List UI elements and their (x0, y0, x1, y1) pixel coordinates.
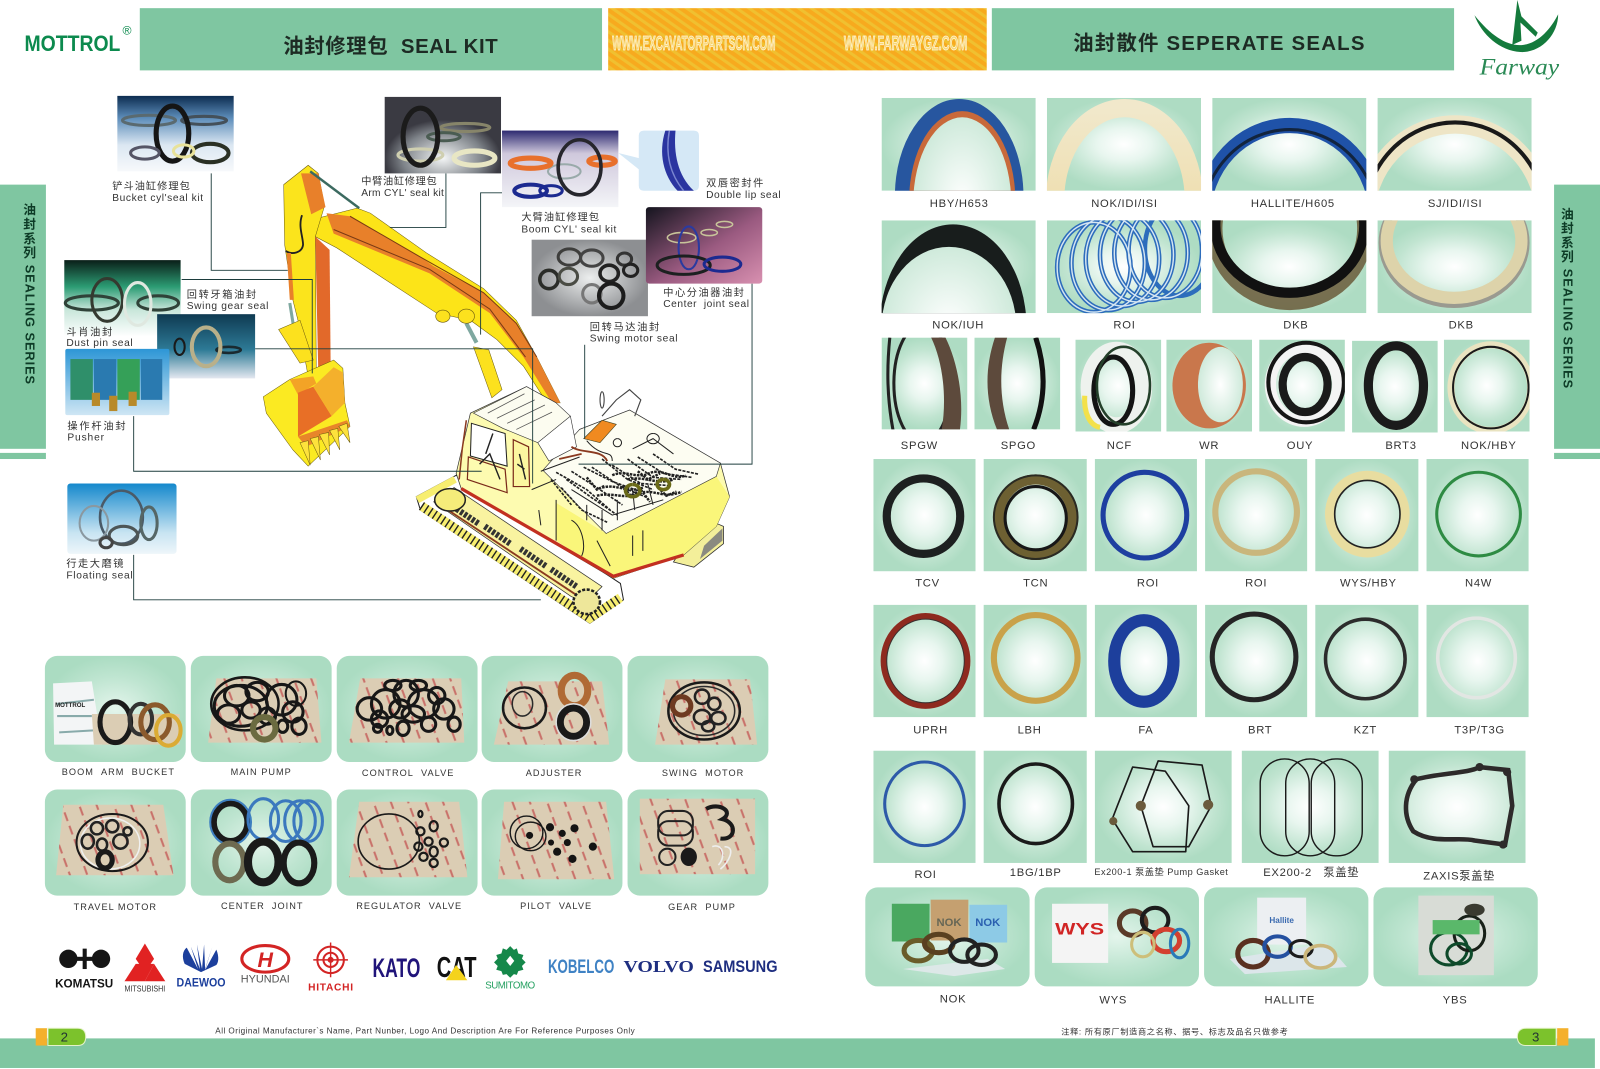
brand logo: MOTTROL: ® (122, 24, 131, 38)
seal: SJ/IDI/ISI (1378, 98, 1532, 191)
labels: seal row 3: NCF (1107, 440, 1132, 452)
sidebar: left sealing series: 系 (23, 231, 36, 246)
lower boom cylinder (473, 347, 502, 398)
logo: Hyundai (241, 946, 290, 985)
seal: 1BG/1BP (984, 751, 1087, 863)
labels: seal row 1 and 2: NOK/IDI/ISI (1091, 198, 1158, 210)
labels: branded kits: YBS (1443, 995, 1467, 1007)
arm (284, 165, 324, 376)
kit: HALLITE (1204, 887, 1368, 986)
seal: DKB black (1212, 220, 1366, 313)
seal: OUY (1259, 340, 1345, 432)
panel: seperate seals row 1 (880, 98, 1546, 430)
labels: seal row 4 (915, 578, 1492, 590)
seal: NCF (1076, 340, 1162, 432)
label: bucket cylinder: Bucket cyl'seal kit (112, 193, 203, 204)
seal: NOK/HBY (1444, 340, 1530, 432)
panel: seperate seals row 5 (873, 605, 1529, 717)
seal: UPRH (873, 605, 976, 717)
logo: Komatsu: KOMATSU (55, 976, 113, 990)
engine deck (543, 410, 720, 533)
sidebar: right sealing series: 封 (1561, 221, 1574, 236)
sidebar: right sealing series: 系 (1561, 235, 1574, 250)
seal: HALLITE/H605 (1212, 98, 1366, 191)
seal: NOK/IDI/ISI (1046, 98, 1201, 191)
seal: N4W (1427, 459, 1529, 571)
labels: seal row 3: WR (1199, 440, 1219, 452)
disclaimer: chinese: 注释: 所有原厂制造商之名称、据号、标志及品名只做参考 (1061, 1026, 1288, 1036)
seal: WR (1166, 340, 1252, 432)
label: swing motor seal: 回转马达油封 (590, 320, 659, 333)
label: swing motor seal: Swing motor seal (590, 334, 678, 345)
photo: floating seal (67, 483, 177, 554)
main track (416, 475, 623, 623)
kit: center joint (191, 790, 332, 896)
labels: seal row 3: SPGO (1001, 440, 1036, 452)
label: dust pin seal: 斗肖油封 (66, 326, 112, 339)
labels: seal row 1 and 2: NOK/IUH (932, 319, 984, 331)
label: pusher: 操作杆油封 (67, 419, 126, 432)
label: swing gear seal: 回转牙箱油封 (187, 288, 256, 301)
labels: branded kits: NOK (940, 994, 966, 1006)
brand logo: MOTTROL: MOTTROL (24, 31, 121, 56)
label: pilot valve: PILOT VALVE (520, 901, 592, 911)
label: main pump: MAIN PUMP (231, 767, 292, 777)
label: boom cylinder: Boom CYL' seal kit (521, 225, 616, 236)
brand logo: Farway: Farway (1479, 54, 1560, 80)
labels: seal row 4: N4W (1465, 578, 1492, 590)
labels: seal row 5: BRT (1248, 724, 1272, 736)
sidebar: left sealing series: SEALING SERIES (23, 265, 38, 384)
label: dust pin seal: Dust pin seal (66, 338, 133, 349)
photo: pusher (65, 349, 169, 415)
kit: WYS (1035, 887, 1199, 986)
label: regulator valve: REGULATOR VALVE (356, 901, 462, 911)
kit: HALLITE: Hallite (1269, 916, 1294, 925)
photo: bucket cylinder seal kit (117, 96, 234, 171)
labels: seal row 6: ROI (914, 869, 937, 881)
kit: NOK (865, 887, 1030, 986)
labels: seal row 4: ROI (1137, 578, 1159, 590)
photo: boom cylinder seal kit (502, 131, 618, 207)
label: boom cylinder (521, 210, 616, 236)
photo: dust pin seal (64, 260, 181, 337)
labels: seal row 6: Ex200-1 泵盖垫 Pump Gasket (1094, 866, 1228, 877)
label: double lip seal: 双唇密封件 (706, 177, 763, 190)
kit: boom arm bucket (45, 656, 186, 762)
label: arm cylinder (361, 175, 444, 199)
labels: seal row 3 (901, 440, 1517, 452)
labels: seal row 4: TCV (915, 578, 940, 590)
labels: seal row 6: ZAXIS泵盖垫 (1423, 868, 1495, 882)
heading: seal kit: 油封修理包 SEAL KIT (283, 35, 498, 58)
logo: Cat: CAT (437, 952, 477, 984)
seal: BRT3 (1352, 340, 1438, 432)
sidebar: right sealing series: 油 (1561, 206, 1574, 221)
excavator illustration (263, 165, 730, 623)
brand logos row (55, 943, 778, 993)
seal: ROI blue (1095, 459, 1197, 571)
label: floating seal (66, 557, 133, 581)
label: travel motor: TRAVEL MOTOR (74, 902, 157, 912)
seal: EX200-2 pump gasket (1242, 751, 1379, 863)
logo: Volvo: VOLVO (623, 957, 694, 976)
label: arm cylinder: 中臂油缸修理包 (361, 175, 437, 188)
cab windows (470, 423, 507, 466)
logo: Hyundai: H (258, 948, 274, 972)
banner: website addresses: WWW.EXCAVATORPARTSCN.COM (612, 33, 776, 55)
logo: Mitsubishi: MITSUBISHI (124, 984, 165, 993)
labels: seal row 6: 1BG/1BP (1010, 867, 1062, 879)
kit: control valve (337, 656, 478, 762)
label: floating seal: Floating seal (66, 570, 133, 581)
engine detail (532, 434, 699, 566)
photo: double lip seal (618, 131, 699, 191)
labels: seal row 3: SPGW (901, 440, 938, 452)
page number: 3 (1517, 1028, 1568, 1046)
sidebar: left sealing series: 油 (23, 202, 36, 217)
arm cylinder and linkage (287, 253, 294, 300)
rear counterweight (556, 476, 730, 578)
seal: SPGO (974, 338, 1060, 430)
label: center joint seal: Center joint seal (663, 299, 749, 310)
labels: seal row 6 (914, 865, 1495, 882)
photo: arm cylinder seal kit (385, 97, 501, 173)
label: pusher: Pusher (67, 433, 105, 444)
label: control valve: CONTROL VALVE (362, 768, 454, 778)
sidebar: right sealing series (1554, 185, 1600, 459)
labels: seal row 5: UPRH (913, 724, 948, 736)
seal: SPGW (882, 338, 968, 430)
label: swing motor: SWING MOTOR (662, 768, 744, 778)
sidebar: right sealing series: SEALING SERIES (1560, 269, 1575, 388)
seal: NOK/IUH (882, 220, 1036, 314)
disclaimer: english: All Original Manufacturer`s Name, Part Nunber, Logo And Description Are For Reference Purposes Only (215, 1026, 636, 1035)
seal: TCV (873, 459, 976, 571)
banner: website addresses (608, 8, 987, 70)
seal: LBH (984, 605, 1087, 717)
heading: seal kit (140, 8, 602, 70)
label: dust pin seal (66, 326, 133, 349)
labels: seal row 1 and 2: ROI (1113, 319, 1136, 331)
kit: main pump (191, 656, 332, 762)
label: boom cylinder: 大臂油缸修理包 (521, 210, 599, 223)
labels: seal row 5 (913, 724, 1505, 736)
labels: seal row 6: EX200-2 泵盖垫 (1263, 865, 1359, 879)
labels: branded kits: HALLITE (1265, 995, 1315, 1007)
banner: website addresses: WWW.FARWAYGZ.COM (844, 33, 967, 55)
page number: 2 (36, 1028, 86, 1046)
boom (305, 208, 560, 403)
seal: KZT (1315, 605, 1418, 717)
page number: 3: 3 (1532, 1029, 1539, 1044)
page number: 2: 2 (61, 1029, 68, 1044)
label: swing gear seal (187, 288, 268, 312)
labels: seal row 1 and 2: DKB (1449, 319, 1474, 331)
label: boom arm bucket: BOOM ARM BUCKET (62, 767, 175, 777)
panel: seperate seals row 4 (873, 459, 1529, 571)
label: adjuster: ADJUSTER (526, 768, 582, 778)
labels: seal row 4: WYS/HBY (1340, 578, 1397, 590)
labels: seal row 5: LBH (1018, 724, 1042, 736)
logo: Samsung: SAMSUNG (703, 958, 778, 976)
label: double lip seal: Double lip seal (706, 190, 781, 201)
logo: Hitachi (308, 943, 353, 993)
bucket (263, 360, 350, 466)
label: gear pump: GEAR PUMP (668, 902, 736, 912)
label: bucket cylinder: 铲斗油缸修理包 (112, 180, 190, 193)
leader lines (134, 173, 752, 600)
label: floating seal: 行走大磨镜 (66, 557, 123, 570)
labels: seal row 5: FA (1138, 724, 1153, 736)
seal: ZAXIS pump gasket (1389, 751, 1526, 863)
red skirt (461, 489, 684, 576)
labels: seal row 3: OUY (1287, 440, 1313, 452)
seal: HBY/H653 (882, 98, 1036, 191)
labels: seal row 4: ROI (1245, 578, 1267, 590)
seal: TCN (984, 459, 1087, 571)
seal: EX200-1 pump gasket (1095, 751, 1232, 863)
cab roof (473, 387, 570, 443)
label: swing gear seal: Swing gear seal (187, 301, 268, 312)
sidebar: right sealing series: 列 (1561, 249, 1574, 264)
label: bucket cylinder (112, 180, 203, 204)
seal: ROI thin (873, 751, 976, 863)
logo: Kato: KATO (372, 953, 420, 983)
logo: Sumitomo (485, 946, 536, 991)
photo: swing motor seal (532, 240, 648, 316)
upper body (456, 387, 730, 578)
kit: WYS: WYS (1055, 920, 1104, 938)
seal: FA (1095, 605, 1197, 717)
labels: seal row 5: T3P/T3G (1454, 724, 1505, 736)
seal: WYS/HBY (1315, 459, 1418, 571)
logo: Daewoo: DAEWOO (177, 975, 226, 989)
heading: seperate seals (992, 8, 1454, 70)
labels: seal row 1 and 2: SJ/IDI/ISI (1428, 198, 1482, 210)
panel: seperate seals row 3 (882, 324, 1531, 443)
logo: Daewoo (177, 945, 226, 989)
heading: seperate seals: 油封散件 SEPERATE SEALS (1073, 32, 1366, 55)
panel: seperate seals row 6 (873, 751, 1526, 863)
seal: T3P/T3G (1427, 605, 1529, 717)
labels: seal row 5: KZT (1354, 724, 1377, 736)
label: center joint seal (663, 286, 749, 310)
kit: travel motor (45, 790, 186, 896)
label: double lip seal (706, 177, 781, 201)
label: swing motor seal (590, 320, 678, 345)
logo: Komatsu (55, 949, 113, 990)
labels: branded kits (940, 994, 1467, 1007)
labels: seal row 1 and 2: HALLITE/H605 (1251, 198, 1335, 210)
label: center joint: CENTER JOINT (221, 901, 304, 911)
panel: seal kit photos (45, 656, 768, 912)
labels: seal row 4: TCN (1023, 578, 1048, 590)
footer band (0, 1038, 1595, 1068)
logo: Hitachi: HITACHI (308, 982, 353, 993)
kit: YBS (1373, 887, 1538, 986)
photo: swing gear seal (157, 314, 255, 378)
brand logo: Farway (1474, 0, 1560, 80)
seal: ROI coil (1047, 220, 1202, 314)
label: center joint seal: 中心分油器油封 (663, 286, 744, 299)
logo: Mitsubishi (124, 944, 165, 993)
kit: regulator valve (337, 790, 478, 896)
label: arm cylinder: Arm CYL' seal kit (361, 188, 444, 199)
right track (673, 523, 723, 567)
labels: seal row 3: NOK/HBY (1461, 440, 1517, 452)
labels: seal row 1 and 2 (930, 198, 1482, 331)
seal: BRT (1205, 605, 1307, 717)
labels: branded kits: WYS (1099, 995, 1127, 1007)
kit: NOK: NOK (937, 917, 961, 929)
kit: swing motor (628, 656, 768, 762)
labels: seal row 1 and 2: DKB (1283, 319, 1309, 331)
seal: ROI tan (1205, 459, 1307, 571)
photo: center joint seal (646, 207, 762, 284)
labels: seal row 3: BRT3 (1385, 440, 1417, 452)
sidebar: left sealing series: 封 (23, 216, 36, 231)
sidebar: left sealing series: 列 (23, 245, 36, 260)
hatch handle and rail (584, 420, 616, 443)
kit: boom arm bucket: MOTTROL (55, 702, 86, 709)
seal: DKB cream (1378, 220, 1532, 313)
panel: branded seal kits (865, 887, 1538, 986)
logo: Sumitomo: SUMITOMO (485, 980, 536, 991)
kit: gear pump (628, 790, 768, 896)
logo: Kobelco: KOBELCO (548, 956, 614, 978)
sidebar: left sealing series (0, 185, 46, 459)
kit: NOK: NOK (975, 917, 1000, 929)
labels: seal row 1 and 2: HBY/H653 (930, 198, 989, 210)
logo: Hyundai: HYUNDAI (241, 973, 290, 985)
label: pusher (67, 419, 126, 444)
kit: adjuster (482, 656, 622, 762)
kit: pilot valve (482, 790, 622, 896)
